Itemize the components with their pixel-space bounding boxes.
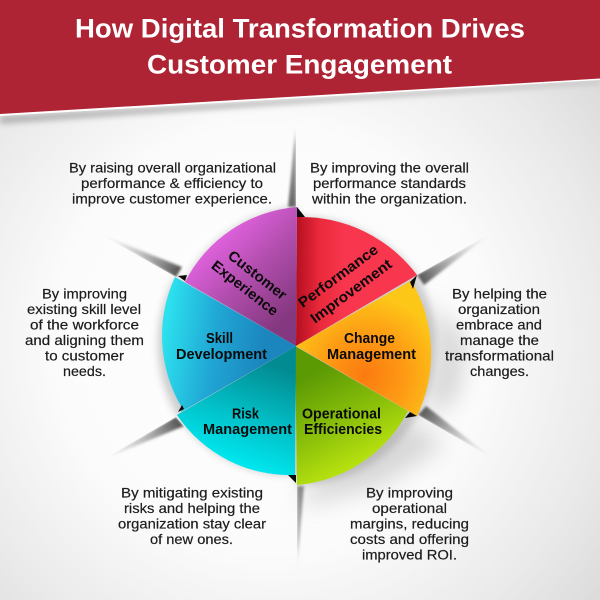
label: management (change): Management (327, 347, 416, 363)
text block: skill development: and aligning them (25, 332, 144, 348)
text block: customer experience (69, 160, 276, 206)
text block: risk management: organization stay clear (118, 516, 266, 532)
text block: operational efficiencies: improved ROI. (362, 546, 457, 562)
text block: skill development: to customer (45, 348, 124, 364)
label: change: Change (344, 331, 395, 347)
text block: performance improvement: performance standards (313, 175, 466, 191)
text block: operational efficiencies: operational (372, 500, 447, 516)
label: risk: Risk (232, 406, 260, 422)
background folds and shadows (114, 133, 481, 556)
segment: customer experience (185, 207, 297, 346)
text block: change management: embrace and (456, 316, 542, 332)
title (75, 14, 525, 80)
label: improvement: Improvement (308, 256, 395, 327)
text block: operational efficiencies: costs and offering (350, 531, 469, 547)
title: Customer Engagement (147, 50, 452, 80)
text block: skill development: By improving (42, 286, 127, 302)
text block: performance improvement: within the organization. (311, 190, 467, 206)
label: skill: Skill (206, 331, 233, 347)
text block: customer experience: performance & efficiency to (81, 175, 263, 191)
wheel diagram (158, 207, 435, 485)
segment: risk management (177, 346, 296, 475)
text block: operational efficiencies (350, 484, 469, 562)
text block: operational efficiencies: By improving (366, 484, 453, 500)
text block: skill development: of the workforce (30, 316, 139, 332)
text block: change management (445, 286, 554, 379)
wheel drop shadow (158, 207, 435, 485)
text block: change management: transformational (445, 348, 554, 364)
text block: risk management: By mitigating existing (121, 484, 263, 500)
segment: performance improvement (296, 217, 417, 346)
label: performance: Performance (296, 242, 382, 311)
label: experience: Experience (208, 258, 281, 320)
label: efficiencies: Efficiencies (304, 422, 382, 438)
text block: risk management: risks and helping the (124, 500, 260, 516)
corner fold triangles (178, 207, 417, 483)
label: customer: Customer (224, 248, 290, 304)
label: operational: Operational (302, 406, 381, 422)
label: management (risk): Management (203, 422, 292, 438)
text block: change management: organization (458, 301, 540, 317)
segment: operational efficiencies (295, 346, 408, 485)
text block: operational efficiencies: margins, reducing (350, 516, 469, 532)
text block: risk management (118, 484, 266, 547)
segment labels (176, 242, 416, 438)
text block: performance improvement: By improving the overall (310, 160, 469, 176)
text block: risk management: of new ones. (150, 531, 233, 547)
text block: skill development: existing skill level (27, 301, 141, 317)
text block: change management: manage the (460, 332, 539, 348)
text block: customer experience: By raising overall organizational (69, 160, 276, 176)
text block: skill development: needs. (63, 363, 106, 379)
text block: change management: By helping the (452, 286, 547, 302)
segment: change management (296, 279, 431, 416)
text block: skill development (25, 286, 144, 379)
header banner (0, 0, 600, 124)
title: How Digital Transformation Drives (75, 14, 525, 44)
text block: performance improvement (310, 160, 469, 206)
segment: skill development (162, 277, 296, 412)
text block: customer experience: improve customer experience. (72, 190, 272, 206)
text block: change management: changes. (470, 363, 529, 379)
label: development: Development (176, 347, 267, 363)
